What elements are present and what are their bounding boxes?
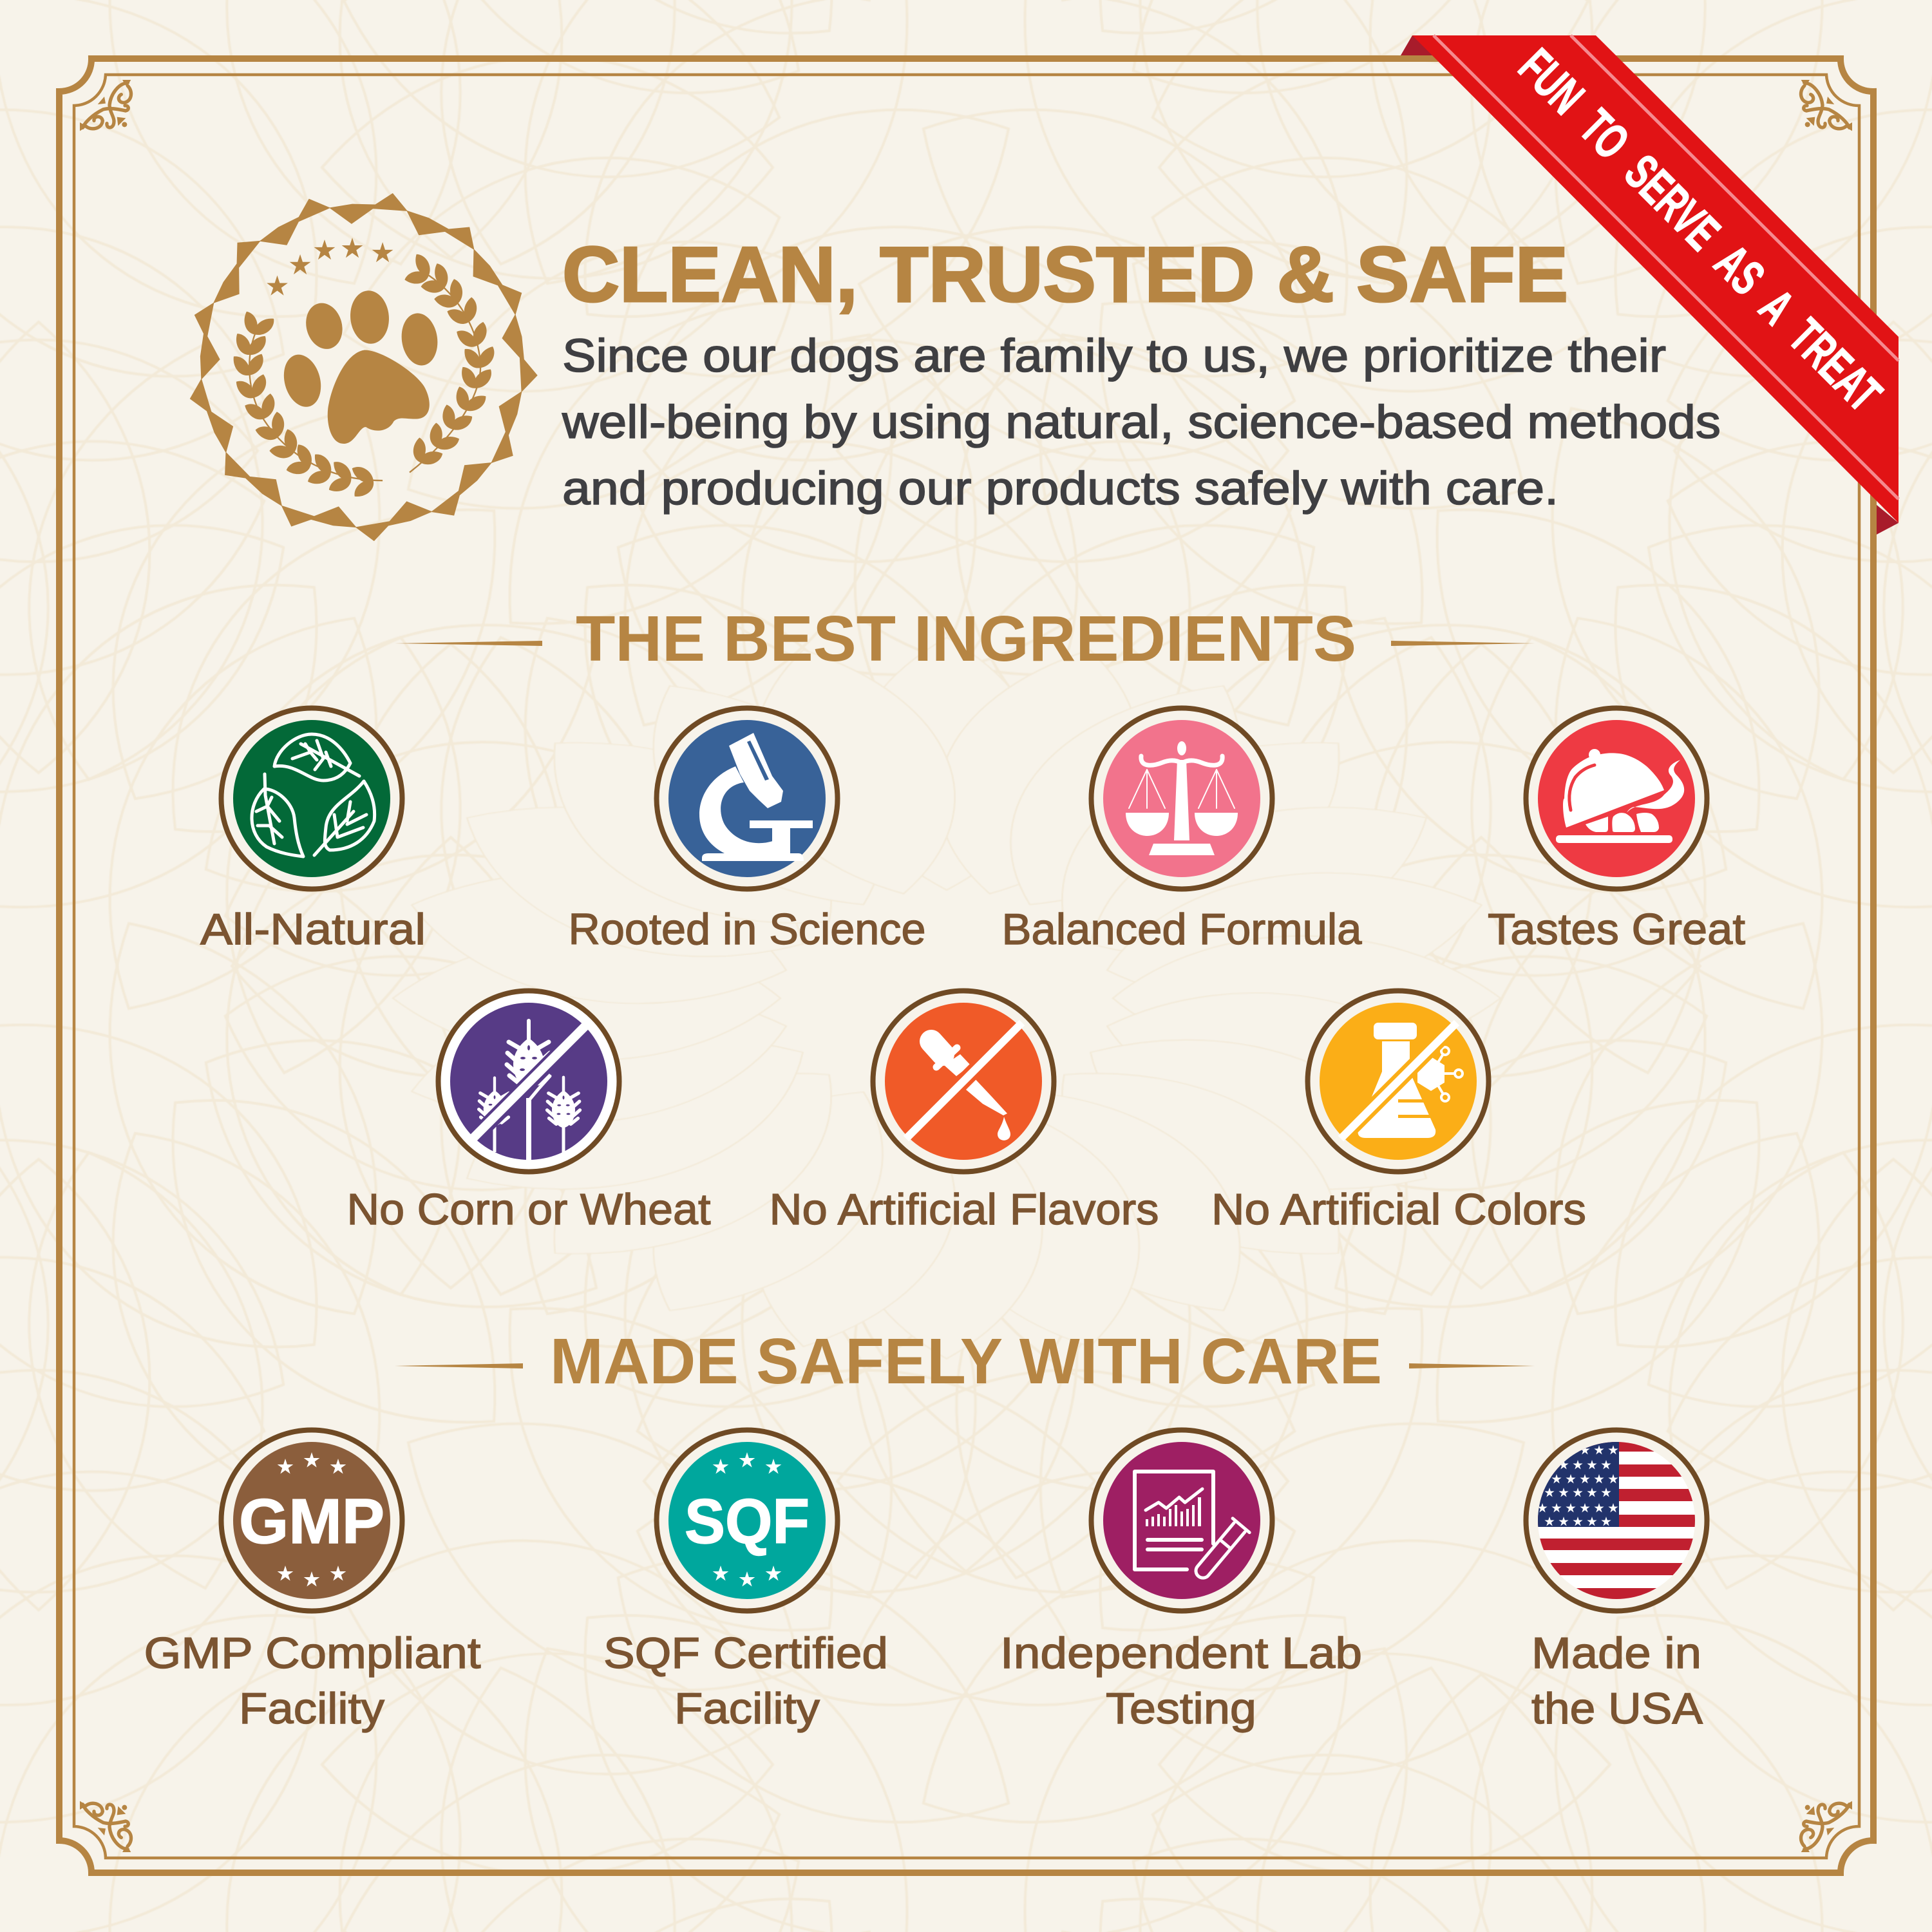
- icon: all-natural: [222, 708, 402, 889]
- label: made in the usa: the USA: [1531, 1684, 1703, 1733]
- label: sqf certified facility: [603, 1629, 888, 1733]
- icon: independent lab testing: [1091, 1430, 1273, 1611]
- seal: paw with laurel and stars: [177, 183, 543, 550]
- label: balanced formula: Balanced Formula: [1002, 905, 1362, 954]
- label: independent lab testing: Independent Lab: [1000, 1629, 1362, 1678]
- heading: the best ingredients: [395, 603, 1535, 675]
- icon: serving cloche: [1526, 708, 1707, 889]
- icon: gmp badge: [222, 1430, 402, 1611]
- label: sqf certified facility: Facility: [674, 1684, 820, 1733]
- heading: made safely with care: MADE SAFELY WITH CARE: [550, 1325, 1382, 1397]
- icon: sqf badge: [657, 1430, 837, 1611]
- intro text: well-being by using natural, science-based methods: [562, 397, 1721, 448]
- label: made in the usa: Made in: [1531, 1629, 1701, 1678]
- label: independent lab testing: [1000, 1629, 1362, 1733]
- label: no artificial colors: No Artificial Colors: [1211, 1185, 1586, 1234]
- icon: usa flag: [1526, 1430, 1707, 1611]
- icon: no artificial colors: [1307, 990, 1489, 1172]
- label: rooted in science: Rooted in Science: [568, 905, 926, 954]
- label: made in the usa: [1531, 1629, 1703, 1733]
- intro text: and producing our products safely with care.: [562, 463, 1558, 515]
- ribbon: fun to serve as a treat: [1401, 35, 1899, 535]
- heading: the best ingredients: THE BEST INGREDIENTS: [576, 603, 1356, 675]
- icon: no corn or wheat: [438, 990, 620, 1172]
- label: gmp compliant facility: Facility: [239, 1684, 384, 1733]
- label: gmp compliant facility: GMP Compliant: [144, 1629, 481, 1678]
- icon: microscope: [657, 708, 837, 889]
- intro text: Since our dogs are family to us, we prioritize their: [562, 330, 1666, 382]
- label: gmp compliant facility: [144, 1629, 481, 1733]
- label: all-natural: All-Natural: [200, 905, 426, 954]
- label: sqf certified facility: SQF Certified: [603, 1629, 888, 1678]
- label: independent lab testing: Testing: [1106, 1684, 1256, 1733]
- icon: balance scale: [1091, 708, 1273, 889]
- icon: no artificial flavors: [873, 990, 1054, 1172]
- label: no artificial flavors: No Artificial Flavors: [769, 1185, 1159, 1234]
- title: CLEAN, TRUSTED & SAFE: [562, 231, 1568, 318]
- icon: gmp badge: GMP: [239, 1486, 384, 1557]
- label: tastes great: Tastes Great: [1488, 905, 1745, 954]
- icon: sqf badge: SQF: [685, 1486, 810, 1557]
- label: no corn or wheat: No Corn or Wheat: [346, 1185, 711, 1234]
- intro text: [562, 330, 1721, 515]
